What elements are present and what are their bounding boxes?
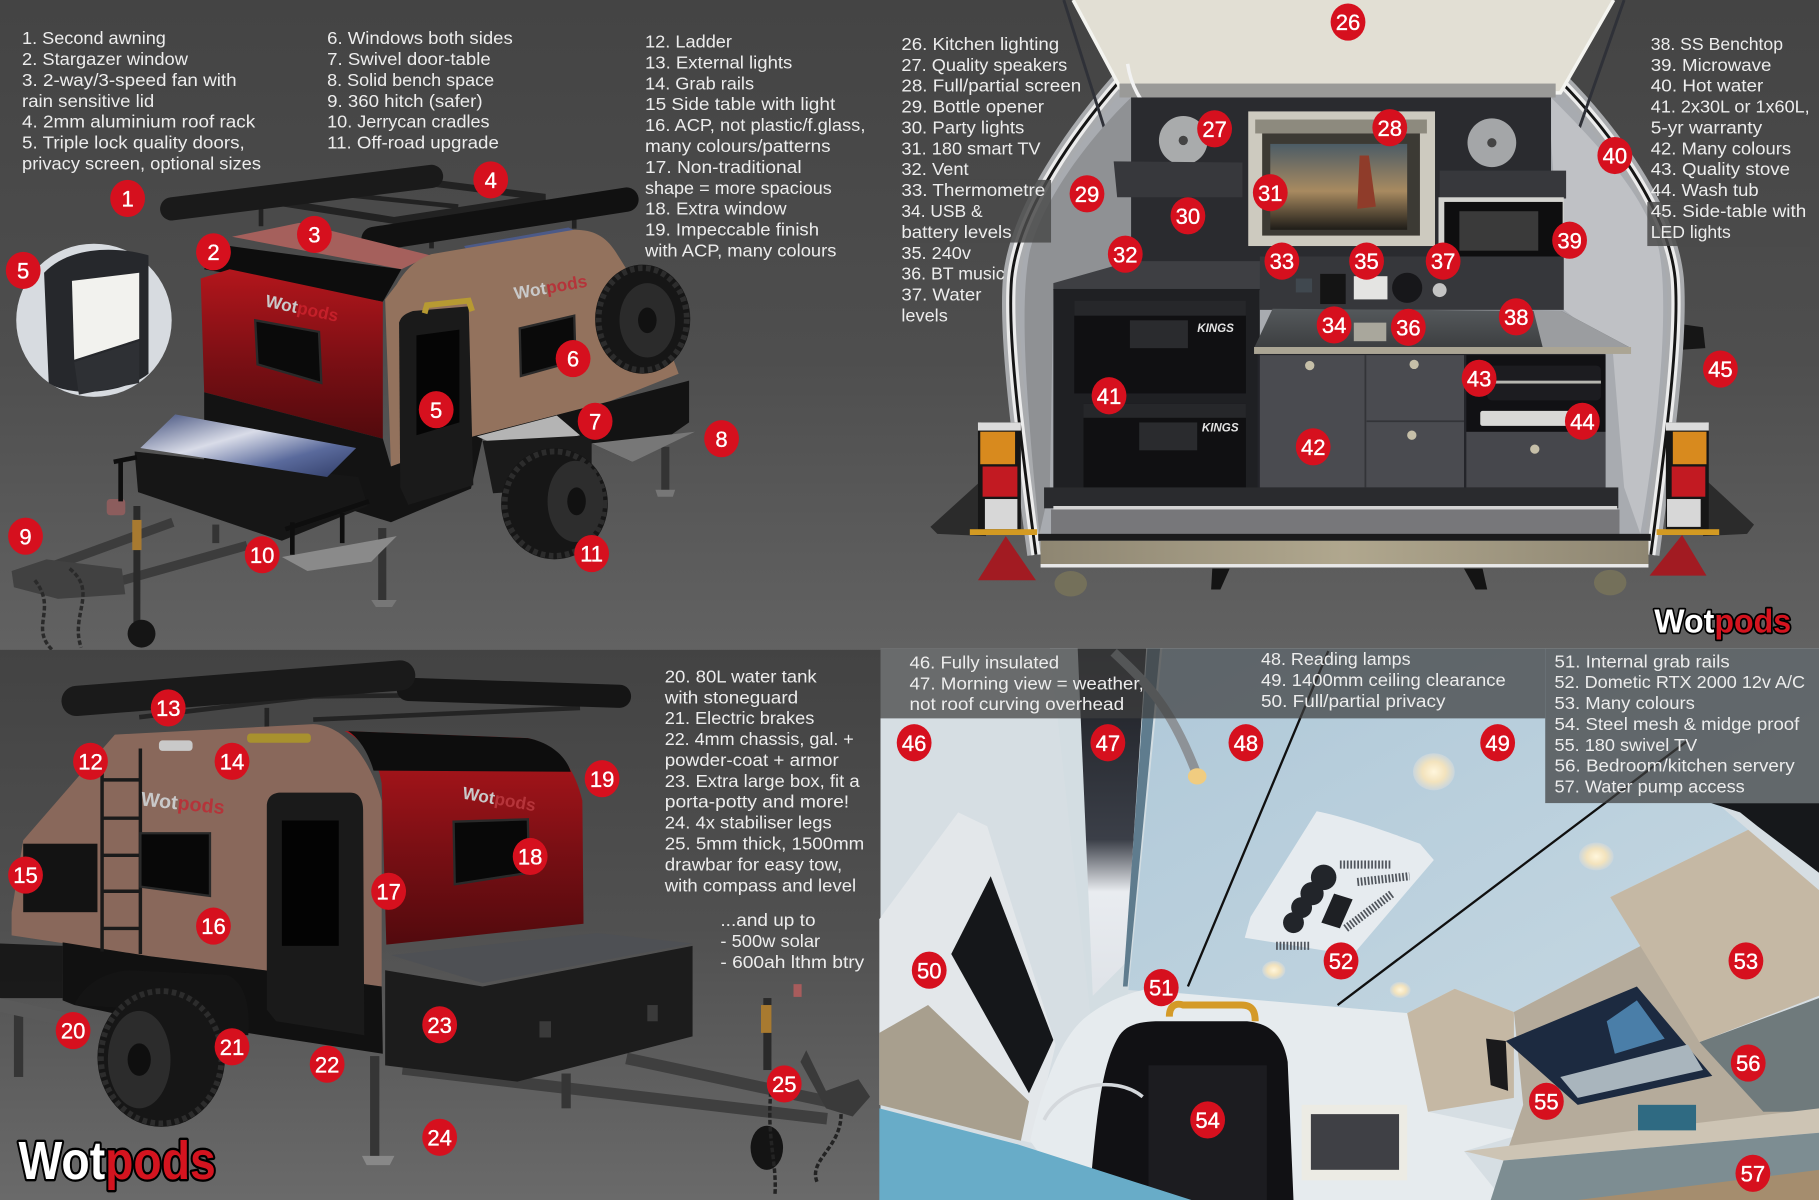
text: features 38 to 45: 42. Many colours [1651,138,1791,158]
number markers: exterior front: 4 [485,168,497,193]
number markers: kitchen: 39 [1557,228,1582,253]
number markers: exterior rear: 13 [156,696,180,721]
number markers: interior: 50 [917,958,941,983]
number markers: exterior front: 6 [567,347,579,372]
icon: air conditioner [1245,811,1434,955]
text: features 51 to 57: 56. Bedroom/kitchen servery [1555,756,1795,776]
number markers: exterior rear: 22 [315,1052,339,1077]
text: features 26 to 37: 37. Water [901,285,982,305]
icon: ceiling lights [1188,753,1614,998]
icon: spare wheel [595,265,690,374]
text: features 38 to 45: 44. Wash tub [1651,180,1759,200]
number markers: kitchen: 34 [1322,313,1346,338]
number markers: kitchen [1070,3,1738,465]
text: features 12 to 19 [644,32,865,260]
icon: television [1486,986,1712,1105]
text: features 26 to 37: 28. Full/partial screen [901,76,1081,96]
number markers: exterior rear: 16 [201,914,226,939]
number markers: exterior rear: 12 [78,749,103,774]
text: features 12 to 19: 15 Side table with light [645,94,835,114]
text: features 38 to 45: 38. SS Benchtop [1651,34,1783,54]
panel: exterior rear three-quarter view [0,650,880,1200]
icon: wall lamp [1044,1085,1143,1120]
icon: desk and lower storage [1464,1105,1819,1200]
text: features 26 to 37: 33. Thermometre [901,180,1045,200]
icon: inset door photo [16,244,172,397]
text: features 38 to 45 [1651,34,1810,242]
icon: logos on body: Wotpods [140,789,226,819]
icon: speakers [1159,116,1516,167]
icon: fridge cabinet: KINGS [1197,322,1234,335]
panel: exterior front three-quarter view [0,0,880,650]
icon: underbody wheels and legs [1055,569,1626,597]
number markers: exterior front [6,161,739,573]
icon: control panel with sockets [1260,256,1564,310]
number markers: kitchen: 43 [1467,366,1491,391]
number markers: interior: 47 [1096,731,1120,756]
number markers: kitchen: 44 [1570,409,1595,434]
text: features 26 to 37: 36. BT music [901,264,1005,284]
text: solar and battery options: ...and up to [720,910,816,930]
number markers: exterior front: 5 [430,398,442,423]
text: features 20 to 25: drawbar for easy tow, [665,854,842,874]
icon: yellow grab rail [1169,1004,1255,1021]
text: features 20 to 25: 25. 5mm thick, 1500mm [665,834,864,854]
text: features 26 to 37 [901,34,1081,325]
icon: ceiling [1128,649,1819,1013]
text: features 1 to 5: rain sensitive lid [22,91,154,111]
number markers: kitchen: 30 [1176,204,1200,229]
icon: brown side wall [385,230,679,467]
icon: hatch lid [1064,0,1624,139]
text: features 20 to 25: porta-potty and more! [665,792,849,812]
icon: stove and wash tub [1466,355,1606,432]
icon: logos on body: Wotpods [461,783,537,815]
number markers: kitchen: 45 [1708,357,1733,382]
icon: door [399,301,473,505]
number markers: exterior rear: 23 [427,1013,452,1038]
text: features 12 to 19: 17. Non-traditional [645,157,802,177]
text: features 38 to 45: 45. Side-table with [1651,201,1806,221]
text: features 26 to 37: 30. Party lights [901,117,1025,137]
icon: left mudguard plate [930,480,986,536]
text: features 38 to 45: 41. 2x30L or 1x60L, [1651,97,1810,117]
number markers: exterior front: 5 [17,259,29,284]
text: features 38 to 45: 5-yr warranty [1651,117,1762,137]
text: features 46 and 47 [910,652,1144,714]
text: features 48 to 50: 48. Reading lamps [1261,649,1411,669]
icon: floor and stainless lip [1038,487,1651,568]
text: features 12 to 19: 16. ACP, not plastic/f.glass, [645,115,865,135]
text backing: left column over arch [900,180,1051,243]
text: features 38 to 45: 43. Quality stove [1651,159,1790,179]
text: features 26 to 37: 29. Bottle opener [901,97,1044,117]
text: features 1 to 5: 2. Stargazer window [22,49,188,69]
icon: television and screen frame [1248,111,1435,246]
text: features 1 to 5: 4. 2mm aluminium roof rack [22,112,256,132]
icon: windows [140,819,529,896]
icon: fridge cabinet: KINGS [1202,422,1239,435]
number markers: interior: 52 [1329,949,1353,974]
text: solar and battery options: - 500w solar [720,931,820,951]
text: features 1 to 5: 3. 2-way/3-speed fan with [22,70,237,90]
text: features 1 to 5: privacy screen, optional sizes [22,153,261,173]
number markers: kitchen: 29 [1075,182,1099,207]
number markers: kitchen: 41 [1097,384,1121,409]
icon: logos on body: Wotpods [264,291,340,326]
text: features 6 to 11: 9. 360 hitch (safer) [327,91,483,111]
text: features 26 to 37: 35. 240v [901,243,971,263]
icon: cabinets and back wall of kitchenette [1407,830,1819,1149]
text: features 46 and 47: 47. Morning view = weather, [910,673,1144,693]
number markers: interior: 46 [902,731,926,756]
text: features 1 to 5 [22,28,261,173]
text: features 48 to 50: 49. 1400mm ceiling clearance [1261,670,1506,690]
text: features 12 to 19: 19. Impeccable finish [645,220,819,240]
text: features 26 to 37: levels [901,305,948,325]
icon: grab rail and light [159,733,311,751]
number markers: interior: 57 [1741,1161,1765,1186]
text: features 1 to 5: 5. Triple lock quality doors, [22,133,245,153]
number markers: exterior front: 8 [715,427,728,452]
text: features 6 to 11: 6. Windows both sides [327,28,513,48]
icon: side table wing [1671,323,1705,350]
text: features 48 to 50 [1261,649,1506,711]
text: features 26 to 37: 31. 180 smart TV [901,138,1041,158]
text: features 6 to 11: 10. Jerrycan cradles [327,112,490,132]
number markers: exterior rear: 19 [590,767,614,792]
icon: stabiliser legs [212,447,675,607]
number markers: exterior rear: 20 [61,1019,85,1044]
number markers: kitchen: 38 [1504,305,1528,330]
icon: bed [879,1108,1191,1200]
text: features 51 to 57: 53. Many colours [1555,693,1695,713]
text: features 12 to 19: many colours/patterns [645,136,831,156]
icon: fridge cabinet [1053,289,1260,498]
icon: logos on body: Wotpods [512,271,589,303]
text: features 6 to 11: 7. Swivel door-table [327,49,491,69]
icon: large storage box [385,933,693,1082]
text: features 51 to 57: 51. Internal grab rails [1555,651,1730,671]
number markers: kitchen: 36 [1396,315,1421,340]
text: features 26 to 37: 32. Vent [901,159,969,179]
panel: interior view [879,649,1819,1200]
text: features 20 to 25: with compass and level [664,875,856,895]
icon: ceiling trim lines [1188,651,1688,1005]
icon: side table box [0,844,97,1027]
number markers: exterior front: 3 [308,223,321,248]
icon: small window [1302,1105,1407,1180]
number markers: kitchen: 42 [1301,435,1325,460]
number markers: kitchen: 27 [1202,117,1227,142]
icon: long side window [1050,649,1162,1015]
overlay: caption band [880,649,1545,718]
number markers: kitchen: 26 [1336,10,1360,35]
icon: bedroom door [1089,1021,1293,1200]
text: features 1 to 5: 1. Second awning [22,28,166,48]
icon: roof rack and awnings [172,176,626,248]
text: features 51 to 57: 57. Water pump access [1555,777,1745,797]
logo: Wotpods: Wotpods [19,1132,216,1191]
number markers: exterior front: 9 [19,524,32,549]
number markers: interior: 54 [1195,1108,1220,1133]
text: features 46 and 47: 46. Fully insulated [910,652,1059,672]
icon: windows [255,316,575,383]
text: features 12 to 19: 13. External lights [645,52,793,72]
number markers: kitchen: 37 [1431,249,1455,274]
text: features 20 to 25: 21. Electric brakes [665,708,815,728]
text: features 20 to 25: with stoneguard [664,687,798,707]
text: features 12 to 19: with ACP, many colours [644,240,837,260]
icon: shelves [1114,161,1566,198]
text: features 20 to 25: 24. 4x stabiliser legs [665,813,832,833]
icon: shell arch [1011,81,1676,555]
text: features 51 to 57: 54. Steel mesh & midge proof [1555,714,1799,734]
icon: dark top corner [1711,803,1819,873]
icon: left window frame and blinds [879,812,1056,1143]
number markers: exterior front: 10 [250,543,274,568]
number markers: kitchen: 33 [1270,249,1294,274]
number markers: kitchen: 35 [1354,249,1379,274]
text: features 20 to 25: 20. 80L water tank [665,666,817,686]
text: features 20 to 25: 22. 4mm chassis, gal. + [665,729,854,749]
logo: Wotpods: Wotpods [1654,603,1791,640]
number markers: interior [897,724,1770,1192]
number markers: exterior rear: 25 [772,1072,796,1097]
icon: red front wall [345,731,584,945]
icon: back wall [1030,990,1527,1200]
icon: interior left and right walls [1025,97,1663,534]
icon: legs and drawbar [14,1010,827,1165]
number markers: interior: 56 [1736,1051,1760,1076]
number markers: exterior rear: 17 [376,879,401,904]
text: features 6 to 11: 11. Off-road upgrade [327,133,499,153]
icon: logos on body [140,783,537,819]
text: features 51 to 57: 52. Dometic RTX 2000 12v A/C [1555,672,1805,692]
icon: door [267,793,364,1035]
icon: roof rack and awnings [77,675,619,733]
number markers: exterior rear: 14 [220,749,244,774]
text: features 12 to 19: 18. Extra window [645,199,787,219]
text: features 26 to 37: 26. Kitchen lighting [901,34,1059,54]
panel: rear kitchen view [880,0,1819,650]
number markers: exterior front: 11 [580,542,603,567]
number markers: kitchen: 28 [1378,116,1402,141]
text: features 48 to 50: 50. Full/partial privacy [1261,691,1446,711]
text: features 20 to 25 [664,666,864,895]
icon: upper counter [1053,261,1264,290]
icon: rear wheel and fender [74,970,249,1127]
icon: tail lights and reflectors [970,422,1719,580]
icon: jack and hitch [751,984,870,1195]
number markers: kitchen: 40 [1603,144,1627,169]
text: features 26 to 37: battery levels [901,222,1012,242]
number markers: exterior rear [8,689,802,1156]
text: features 6 to 11 [327,28,513,153]
number markers: kitchen: 31 [1258,181,1283,206]
icon: front box with solar lid [114,414,397,571]
icon: logos on body [264,271,589,326]
number markers: interior: 51 [1149,976,1173,1001]
icon: black chassis skirt [204,381,689,522]
text: features 20 to 25: powder-coat + armor [665,750,839,770]
number markers: interior: 48 [1234,731,1258,756]
number markers: exterior front: 2 [207,240,220,265]
icon: brown side wall [12,724,382,986]
text: features 6 to 11: 8. Solid bench space [327,70,494,90]
text: features 12 to 19: shape = more spacious [645,178,832,198]
icon: ladder [102,749,140,954]
text: features 51 to 57: 55. 180 swivel TV [1555,735,1698,755]
icon: trailer roof and stargazer window [204,223,586,302]
text: features 51 to 57 [1555,651,1805,797]
number markers: interior: 53 [1734,949,1758,974]
icon: swivel table and bench [477,415,695,462]
text: features 20 to 25: 23. Extra large box, fit a [665,771,860,791]
overlay: caption box [1545,649,1819,803]
number markers: kitchen: 32 [1113,242,1138,267]
text backing: right column over arch [1647,202,1810,246]
icon: black lower skirt [63,942,383,1054]
number markers: exterior rear: 15 [13,863,38,888]
text: features 12 to 19: 12. Ladder [645,32,732,52]
number markers: interior: 55 [1534,1089,1559,1114]
icon: reading lamp [1114,652,1197,775]
number markers: exterior front: 7 [589,409,601,434]
text: features 38 to 45: LED lights [1651,222,1731,242]
icon: storage cupboards [1258,354,1606,499]
icon: back panel [1131,97,1551,283]
text: features 26 to 37: 27. Quality speakers [901,55,1068,75]
text: solar and battery options: - 600ah lthm btry [720,952,865,972]
text: solar and battery options [720,910,865,972]
icon: microwave [1438,197,1564,261]
text: features 26 to 37: 34. USB & [901,201,983,221]
icon: drawbar and hitch [12,499,247,650]
number markers: exterior rear: 18 [518,845,542,870]
number markers: interior: 49 [1485,731,1510,756]
text: features 46 and 47: not roof curving overhead [910,694,1124,714]
number markers: exterior rear: 24 [427,1125,452,1150]
number markers: exterior front: 1 [121,187,134,212]
icon: right mudguard plate [1703,480,1754,536]
text: features 12 to 19: 14. Grab rails [645,73,754,93]
number markers: exterior rear: 21 [220,1035,244,1060]
icon: red front wall [201,269,383,439]
text: features 38 to 45: 40. Hot water [1651,76,1764,96]
text: features 38 to 45: 39. Microwave [1651,55,1771,75]
icon: rear wheel [483,435,608,559]
icon: stainless benchtop [1254,309,1631,354]
